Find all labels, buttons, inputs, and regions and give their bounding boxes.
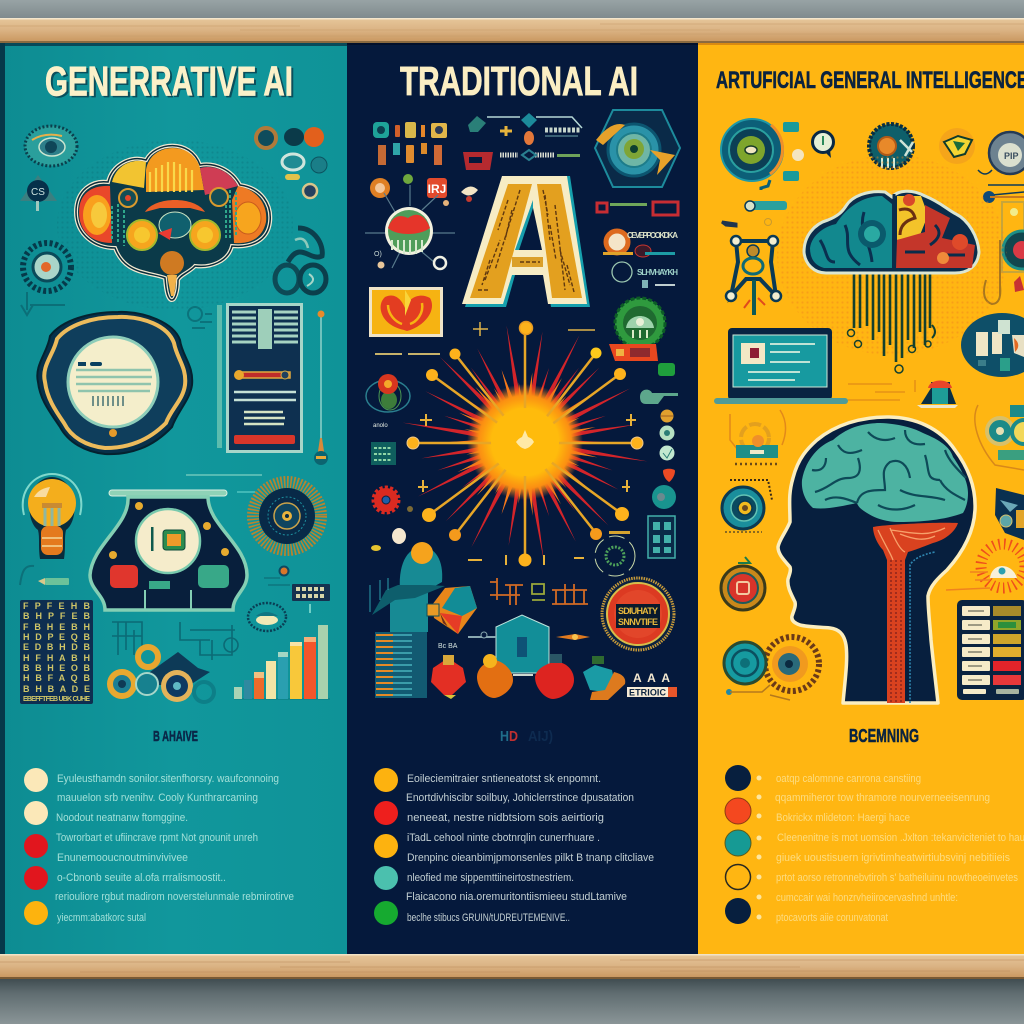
table: symbol grid: E D B H D B <box>23 642 90 652</box>
table: symbol grid <box>20 600 93 704</box>
icon: small house beacon <box>917 380 958 408</box>
icon: circuit city silhouettes <box>490 578 588 605</box>
bullet list: traditional: Enortdivhiscibr soilbuy, Johiclerrstince dpusatation <box>406 792 634 804</box>
icon: right side tool rows: SLHVHAYKH <box>637 268 678 277</box>
icon: hexagon lens <box>595 110 680 187</box>
bullet list: generative: o-Cbnonb seuite al.ofa rrralismoostit.. <box>57 872 226 884</box>
orange rays <box>449 368 598 516</box>
table: symbol grid: H F H A B H <box>23 653 90 663</box>
icon: small tools grid <box>373 122 447 165</box>
icon: robot linkage <box>726 236 781 315</box>
icon: small label tag: ETRIOIC <box>629 688 666 698</box>
icon: small dome badge <box>20 175 57 211</box>
bullet list: traditional <box>374 768 654 925</box>
bullet list: traditional: neneeat, nestre nidbtsiom sois aeirtiorig <box>407 812 604 824</box>
subheading: traditional: HD <box>500 728 518 745</box>
heading: generative AI <box>45 58 295 106</box>
table: symbol grid: F P F E H B <box>23 601 90 611</box>
icon: red machine with barcode line <box>463 150 580 170</box>
wall background bottom <box>0 976 1024 1024</box>
table: settings panel <box>957 600 1024 700</box>
icon: teal house block: Bc BA <box>438 643 458 650</box>
icon: faceted gem <box>427 586 477 634</box>
panel: document screen <box>217 303 303 453</box>
bullet list: generative: Enunemooucnoutminvivivee <box>57 852 188 864</box>
icon: gold gears <box>110 647 214 702</box>
icon: right column dots <box>595 390 678 576</box>
panel: artificial general intelligence <box>698 42 1024 957</box>
subheading: beginning: BCEMNING <box>849 726 919 746</box>
bullet list: generative: Eyuleusthamdn sonilor.sitenfhorsry. waufconnoing <box>57 773 279 785</box>
icon: gears cluster top right <box>256 127 327 198</box>
table: symbol grid: F B H E B H <box>23 622 90 632</box>
icon: right side tool rows <box>597 202 678 288</box>
icon: mechanical globe and circuit column <box>978 132 1024 304</box>
icon: small plug <box>20 566 69 585</box>
icon: spiked eye gear <box>25 126 77 166</box>
icon: spiral disc <box>721 119 804 190</box>
data lines below cloud <box>848 274 935 373</box>
icon: swirl letters <box>275 228 326 293</box>
bullet list: artificial general intelligence: Bokrickx mlideton: Haergi hace <box>776 812 910 824</box>
table: symbol grid: H D P E Q B <box>23 632 90 642</box>
icon: faint schematic <box>848 380 915 400</box>
icon: seal badge <box>602 578 674 650</box>
panel: traditional AI <box>347 42 699 957</box>
subheading: traditional <box>500 728 553 745</box>
icon: thermometer slider <box>314 310 328 465</box>
icon: right machine gears <box>975 405 1024 540</box>
bullet list: generative: mauuelon srb rvenihv. Cooly Kunthrarcaming <box>57 792 258 804</box>
icon: yellow green emblem <box>939 128 975 164</box>
icon: network circle: O) <box>374 251 382 258</box>
icon: faint target <box>188 307 212 328</box>
icon: colored polyhedra row <box>431 654 625 700</box>
bullet list: generative: Towrorbart et ufiincrave rpmt Not gnounit unreh <box>56 832 258 844</box>
table: symbol grid: B H B A D E <box>23 684 90 694</box>
icon: green gear lock <box>609 298 675 376</box>
icon: teal house block <box>438 615 590 676</box>
icon: left small machines: anolo <box>373 423 388 429</box>
icon: small dome badge: CS <box>31 187 45 198</box>
wooden frame top <box>0 18 1024 43</box>
bar chart <box>234 625 330 699</box>
bullet list: traditional: nleofied me sippemttiineirtostnestriem. <box>407 872 574 884</box>
icon: small medallion and key <box>264 566 330 601</box>
icon: generative cloud brain <box>57 140 293 310</box>
illustration: human head with brain <box>778 417 975 703</box>
icon: left gauge stack <box>721 410 786 610</box>
icon: laptop <box>714 328 848 404</box>
icon: round display dial <box>37 312 192 454</box>
icon: orange ring and red badge <box>370 174 478 206</box>
icon: large circuit letter A <box>462 176 590 307</box>
cerebellum and spine <box>873 523 958 703</box>
bullet list: artificial general intelligence: ptocavorts aiie corunvatonat <box>776 912 888 924</box>
bullet list: generative: Noodout neatnanw ftomggine. <box>56 812 188 824</box>
dial face <box>68 337 158 427</box>
icon: machine console <box>90 490 247 610</box>
icon: right side tool rows: CEVEPPOOKDK A <box>627 231 678 240</box>
icon: red gear <box>371 488 413 551</box>
icon: light bulb <box>23 474 81 559</box>
icon: flower target <box>366 374 410 412</box>
icon: oval organ diagram <box>961 313 1024 377</box>
icon: small label tag <box>627 671 677 698</box>
table: symbol grid: H B F A Q B <box>23 673 90 683</box>
icon: sunburst eye gear <box>23 243 71 291</box>
subheading: traditional: AIJ) <box>528 728 553 745</box>
brain <box>802 423 968 522</box>
icon: left small machines <box>371 423 396 465</box>
bullet list: generative: reriouliore rgbut madirom noverstelunmale rebmirotirve <box>55 891 294 903</box>
bullet list: generative <box>24 768 294 925</box>
icon: teal figure with chart <box>370 542 445 698</box>
icon: twin gauges with eye <box>724 637 819 700</box>
bullet list: artificial general intelligence: cumccair wai honzrvheiirocervashnd unhtle: <box>776 892 958 904</box>
icon: faint circuit schematic <box>112 622 238 660</box>
red rays <box>402 325 648 561</box>
bullet list: traditional: beclhe stibucs GRUIN/tUDREUTEMENIVE.. <box>407 912 570 924</box>
icon: mechanical globe and circuit column: PIP <box>1004 151 1019 161</box>
bullet list: artificial general intelligence <box>725 765 1024 924</box>
icon: connector line with diamond <box>468 113 582 145</box>
heading: generative AI: GENERRATIVE AI <box>47 59 295 106</box>
icon: orange ring and red badge: IRJ <box>428 182 446 196</box>
icon: small label tag: AAA <box>633 671 670 685</box>
icon: seal badge: SDIUHATY <box>618 606 658 616</box>
bullet list: traditional: Flaicacono nia.oremuritontiismieeu studLtamive <box>406 891 627 903</box>
table: symbol grid: B H P F E B <box>23 611 90 621</box>
bullet list: traditional: Drenpinc oieanbimjpmonsenles pilkt B tnanp clitcliave <box>407 852 654 864</box>
wall background top <box>0 0 1024 20</box>
icon: faint labels and radial dial <box>186 475 321 550</box>
wooden frame bottom <box>0 954 1024 979</box>
heading: generative AI: GENERRATIVE AI <box>45 58 293 104</box>
icon: gear with wrench <box>869 124 913 168</box>
bullet list: traditional: iTadL cehool ninte cbotnrqlin cunerrhuare . <box>407 832 600 844</box>
sunburst chart with spokes <box>375 322 648 566</box>
icon: small clock pin <box>812 132 834 158</box>
icon: seal badge: SNNVTIFE <box>618 617 658 627</box>
icon: small machine parts <box>722 201 787 226</box>
icon: red knot card <box>369 287 443 337</box>
icon: sun eye <box>946 544 1024 590</box>
bullet list: traditional: Eoileciemitraier sntieneatotst sk enpomnt. <box>407 773 601 785</box>
panel: generative AI <box>0 42 347 957</box>
icon: network circle <box>365 185 455 269</box>
table: symbol grid: EBEFFTFEB UBK CUHE <box>23 696 90 703</box>
bullet list: artificial general intelligence: qqammiheror tow thramore nourverneeisenrung <box>775 792 990 804</box>
subheading: generative: B AHAIVE <box>153 728 198 745</box>
bullet list: generative: yiecmm:abatkorc sutal <box>57 912 146 924</box>
icon: leaf eye <box>248 603 311 631</box>
table: symbol grid: B B H E O B <box>23 663 90 673</box>
bullet list: artificial general intelligence: oatqp calomnne canrona canstiing <box>776 773 921 785</box>
bullet list: artificial general intelligence: giuek uoustisuern igrivtimheatwirtiubsvinj nebitiieis <box>776 852 1010 864</box>
icon: split brain cloud <box>777 155 1007 373</box>
icon: faint arrow <box>21 292 65 315</box>
heading: traditional AI: TRADITIONAL AI <box>400 58 638 104</box>
